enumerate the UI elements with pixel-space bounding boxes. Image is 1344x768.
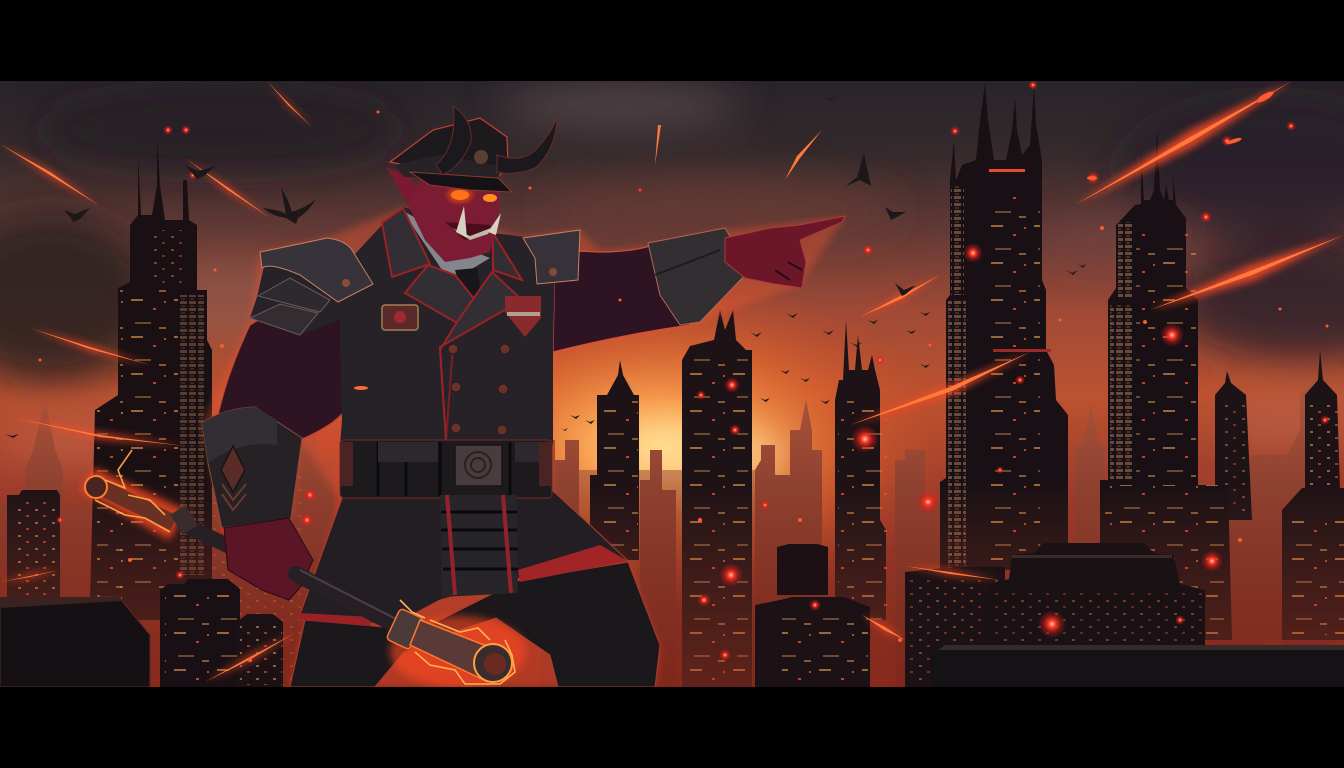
scene frame (0, 80, 1344, 688)
mace shaft behind hand (188, 527, 235, 549)
rim glow (203, 207, 845, 687)
mid city towers (7, 310, 1344, 687)
city haze (0, 480, 1344, 687)
left tower (90, 135, 212, 620)
legs (290, 562, 660, 687)
illustration: demon officer above burning city (0, 81, 1344, 687)
birds (5, 97, 1086, 438)
foreground buildings (160, 543, 1205, 687)
lapels (382, 208, 522, 440)
horns (436, 106, 471, 175)
coat buttons (448, 344, 510, 435)
shirt and tie (406, 212, 490, 296)
mid tower windows (12, 355, 1344, 685)
eyes (447, 187, 497, 203)
glowing red lights (56, 80, 1330, 661)
chest badge and medals (382, 296, 541, 337)
distant skyline (0, 385, 1313, 638)
demon officer (80, 106, 845, 688)
sparks (38, 89, 1328, 662)
distant windows (213, 450, 301, 686)
left hand (224, 518, 313, 600)
big central-right tower (940, 83, 1068, 570)
ear (386, 167, 425, 210)
belt front flap (440, 495, 518, 597)
mace shaft front (296, 570, 400, 626)
upper left arm (218, 320, 342, 440)
left gauntlet (202, 407, 302, 528)
head (386, 106, 557, 262)
face (407, 180, 500, 262)
red tracer streaks (0, 81, 1344, 682)
flaming mace head, upper (80, 450, 190, 540)
right cuff (648, 228, 750, 325)
belt buckle (455, 445, 502, 486)
right pauldron (523, 230, 580, 284)
flaming mace head, lower (386, 600, 526, 688)
coat skirt (298, 490, 628, 626)
ammo belt (340, 440, 552, 498)
left pauldron (250, 238, 373, 335)
cap (390, 118, 512, 192)
pointing arm (553, 246, 690, 352)
coat torso (340, 207, 555, 445)
sky (0, 81, 1344, 687)
foreground rooftops (0, 596, 1344, 687)
right tower (1100, 130, 1232, 640)
pointing hand (725, 216, 845, 288)
clouds (0, 83, 1344, 466)
